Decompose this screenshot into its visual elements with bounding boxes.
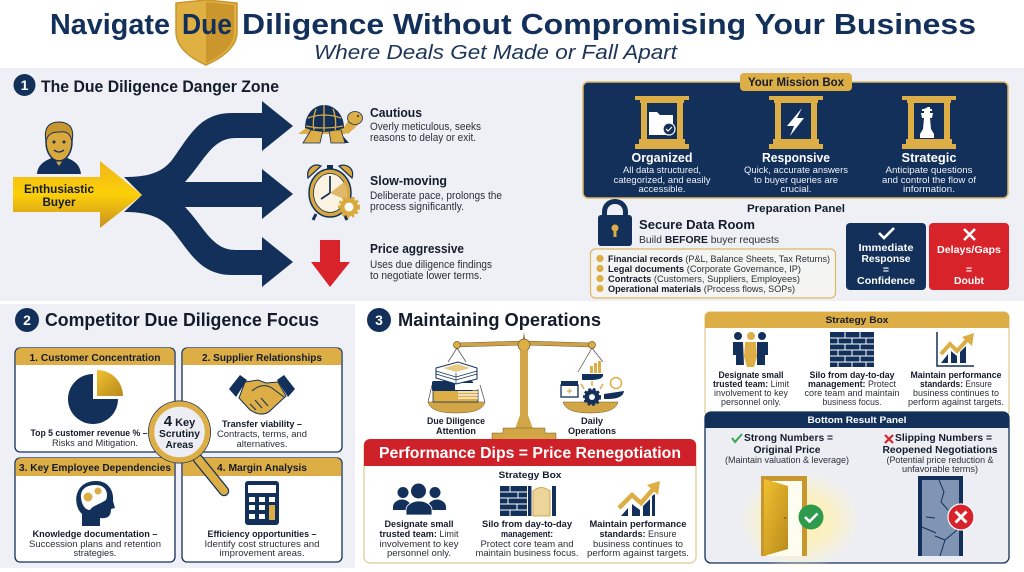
card: key employee dependencies	[15, 458, 175, 562]
strategy: silo: Protect core team and	[480, 539, 574, 549]
arrow: branching navy arrows	[124, 101, 293, 287]
strategy: performance: business continues to	[593, 539, 683, 549]
card: key employee dependencies: 3. Key Employee Dependencies	[19, 463, 171, 474]
card: margin analysis	[182, 458, 342, 562]
card: customer concentration	[15, 348, 175, 452]
panel: bottom result panel: Bottom Result Panel	[808, 415, 906, 426]
card: margin analysis: improvement areas.	[220, 548, 304, 558]
panel: delays and gaps	[929, 223, 1009, 290]
arrow: enthusiastic buyer gold arrow	[13, 161, 142, 228]
strategy: silo	[476, 519, 578, 558]
mission: organized	[614, 96, 711, 194]
icon: red down arrow	[311, 240, 350, 287]
mission: responsive: Quick, accurate answers	[744, 165, 848, 175]
title: Diligence Without Compromising Your Business	[242, 9, 976, 41]
mission box tab: Your Mission Box	[748, 77, 845, 89]
strategy: performance: Maintain performance	[590, 519, 686, 529]
card: supplier relationships: Transfer viability –	[222, 419, 302, 429]
text: performance: perform against targets.	[908, 397, 1004, 407]
mission: responsive: crucial.	[780, 184, 812, 194]
icon: cracked door	[918, 476, 974, 556]
icon: calculator	[245, 481, 279, 525]
panel: right strategy box	[705, 312, 1009, 417]
arrow: enthusiastic buyer gold arrow: Enthusiastic	[24, 182, 94, 196]
mission: strategic: and control the flow of	[882, 175, 976, 185]
label: due diligence attention: Attention	[436, 426, 476, 436]
icon: wall and door	[500, 486, 556, 516]
result: slipping numbers: Reopened Negotiations	[882, 444, 998, 456]
icon: document stack	[432, 362, 478, 402]
mission: strategic: information.	[903, 184, 955, 194]
card: margin analysis: Efficiency opportunities –	[208, 529, 316, 539]
result: strong numbers: Strong Numbers =	[744, 432, 833, 444]
panel: section 2 background	[0, 304, 355, 568]
mission: responsive: to buyer queries are	[754, 175, 838, 185]
text: slow-moving	[370, 174, 502, 213]
icon: head with gears	[76, 481, 115, 526]
strategy: performance: perform against targets.	[587, 548, 689, 558]
text: designate team: personnel only.	[721, 397, 781, 407]
text: silo: core team and maintain	[804, 388, 900, 398]
panel: right strategy box: Strategy Box	[826, 315, 889, 326]
result: slipping numbers	[882, 432, 998, 474]
text: price aggressive	[370, 242, 493, 282]
text: silo	[804, 370, 900, 407]
section 2 heading: 2	[23, 312, 31, 328]
panel: delays and gaps: =	[966, 264, 972, 276]
icon: enthusiastic buyer person	[37, 122, 81, 174]
result: slipping numbers: unfavorable terms)	[902, 464, 978, 474]
chart: pie	[68, 370, 123, 424]
arrow: enthusiastic buyer gold arrow: Buyer	[42, 195, 76, 209]
text: silo: Silo from day-to-day	[810, 370, 895, 380]
heading: preparation panel: Preparation Panel	[747, 203, 845, 215]
section 2 heading: Competitor Due Diligence Focus	[45, 310, 319, 330]
strategy: performance: standards: Ensure	[600, 529, 676, 539]
panel: immediate response: Immediate	[858, 242, 914, 254]
label: daily operations: Daily	[581, 416, 604, 426]
panel: data room checklist: Contracts (Customers, Suppliers, Employees)	[608, 274, 800, 284]
strategy: designate team: personnel only.	[387, 548, 451, 558]
panel: bottom result panel	[705, 412, 1009, 570]
panel: delays and gaps: Doubt	[954, 275, 984, 287]
text: slow-moving: Deliberate pace, prolongs the	[370, 190, 502, 202]
mission: organized: All data structured,	[623, 165, 701, 175]
text: designate team: involvement to key	[714, 388, 788, 398]
text: slow-moving: process significantly.	[370, 201, 464, 213]
icon: growth chart	[619, 481, 660, 516]
panel: data room checklist: Legal documents (Corporate Governance, IP)	[608, 264, 801, 274]
icon: daily operations cluster	[561, 361, 624, 404]
panel: immediate response: Response	[862, 253, 911, 265]
text: performance	[908, 370, 1004, 407]
result: slipping numbers: (Potential price reduction &	[886, 455, 994, 465]
strategy: performance	[587, 519, 689, 558]
card: supplier relationships: Contracts, terms, and	[217, 429, 307, 439]
icon: magnifier with 4 key scrutiny areas: Scrutiny	[159, 429, 200, 440]
text: secure data room: Secure Data Room	[639, 217, 755, 232]
panel: your mission box	[583, 73, 1008, 198]
label: due diligence attention	[427, 416, 485, 436]
strategy: designate team: involvement to key	[380, 539, 459, 549]
strategy: designate team: Designate small	[384, 519, 454, 529]
icon: axis growth chart	[937, 332, 974, 366]
icon: padlock	[598, 202, 632, 246]
card: key employee dependencies: Knowledge documentation –	[32, 529, 158, 539]
panel: data room checklist	[590, 249, 836, 298]
panel: delays and gaps: Delays/Gaps	[937, 244, 1001, 256]
card: supplier relationships: alternatives.	[236, 439, 288, 449]
section 3 heading: Maintaining Operations	[398, 310, 601, 330]
text: silo: business focus.	[822, 397, 882, 407]
icon: magnifier with 4 key scrutiny areas	[148, 400, 224, 491]
strategy: silo: Silo from day-to-day	[482, 519, 573, 529]
text: price aggressive: to negotiate lower terms.	[370, 270, 482, 282]
text: designate team: Designate small	[718, 370, 784, 380]
text: cautious: reasons to delay or exit.	[370, 132, 476, 144]
text: performance: business continues to	[913, 388, 999, 398]
mission: responsive: Responsive	[762, 150, 830, 165]
label: daily operations	[568, 416, 616, 436]
text: price aggressive: Price aggressive	[370, 242, 464, 256]
section 3 heading: 3	[375, 312, 383, 328]
text: performance: standards: Ensure	[920, 379, 992, 389]
strategy: designate team	[380, 519, 459, 558]
section 1 heading: 1	[21, 77, 29, 93]
result: slipping numbers: Slipping Numbers =	[895, 432, 992, 444]
icon: balance scale	[428, 332, 618, 440]
mission box tab	[740, 73, 852, 91]
card: key employee dependencies: strategies.	[74, 548, 116, 558]
card: customer concentration: Top 5 customer revenue % –	[30, 428, 148, 438]
icon: open door with glow	[738, 470, 862, 570]
icon: magnifier with 4 key scrutiny areas: 4 Key	[164, 413, 196, 430]
panel: performance dips: Strategy Box	[498, 470, 562, 481]
icon: handshake	[229, 375, 295, 414]
card: margin analysis: Identify cost structures and	[204, 539, 320, 549]
strategy: silo: management:	[501, 529, 553, 539]
panel: section 1 background	[0, 68, 1024, 301]
title: Due	[182, 9, 232, 41]
strategy: designate team: trusted team: Limit	[380, 529, 459, 539]
text: designate team	[713, 370, 789, 407]
text: silo: management: Protect	[808, 379, 896, 389]
panel: immediate response	[846, 223, 926, 290]
label: due diligence attention: Due Diligence	[427, 416, 485, 426]
panel: data room checklist: Operational materials (Process flows, SOPs)	[608, 284, 795, 294]
card: customer concentration: Risks and Mitigation.	[52, 438, 138, 448]
section 1 heading: The Due Diligence Danger Zone	[41, 77, 279, 96]
text: price aggressive: Uses due diligence findings	[370, 259, 493, 271]
icon: alarm clock with gear	[308, 165, 358, 220]
panel: data room checklist: Financial records (P&L, Balance Sheets, Tax Returns)	[608, 254, 830, 264]
text: cautious	[370, 106, 482, 144]
text: secure data room: Build BEFORE buyer requests	[639, 234, 779, 246]
text: slow-moving: Slow-moving	[370, 174, 447, 188]
card: margin analysis: 4. Margin Analysis	[217, 463, 307, 474]
panel: performance dips	[364, 439, 696, 563]
mission: organized: categorized, and easily	[614, 175, 711, 185]
mission: strategic	[882, 96, 976, 194]
panel: performance dips: Performance Dips = Price Renegotiation	[379, 445, 681, 462]
panel: immediate response: =	[883, 264, 889, 276]
result: strong numbers	[725, 432, 849, 465]
text: performance: Maintain performance	[910, 370, 1002, 380]
subtitle: Where Deals Get Made or Fall Apart	[314, 42, 679, 64]
strategy: silo: maintain business focus.	[476, 548, 578, 558]
label: daily operations: Operations	[568, 426, 616, 436]
mission: organized: accessible.	[638, 184, 686, 194]
icon: magnifier with 4 key scrutiny areas: Areas	[166, 440, 194, 451]
icon: turtle	[298, 105, 362, 143]
icon: brick wall	[830, 332, 874, 367]
card: supplier relationships: 2. Supplier Relationships	[202, 353, 322, 364]
mission: strategic: Anticipate questions	[886, 165, 973, 175]
panel: immediate response: Confidence	[857, 275, 915, 287]
text: secure data room	[639, 217, 779, 246]
mission: strategic: Strategic	[902, 150, 956, 165]
icon: three people	[733, 332, 768, 367]
icon: gold shield behind title	[176, 0, 237, 65]
card: key employee dependencies: Succession plans and retention	[29, 539, 161, 549]
text: cautious: Overly meticulous, seeks	[370, 121, 482, 133]
title: Navigate	[50, 9, 170, 41]
icon: team	[393, 484, 446, 515]
text: designate team: trusted team: Limit	[713, 379, 789, 389]
result: strong numbers: (Maintain valuation & leverage)	[725, 455, 849, 465]
card: supplier relationships	[182, 348, 342, 452]
text: cautious: Cautious	[370, 106, 422, 120]
result: strong numbers: Original Price	[754, 444, 821, 456]
mission: responsive	[744, 96, 848, 194]
mission: organized: Organized	[632, 150, 693, 165]
card: customer concentration: 1. Customer Concentration	[30, 353, 160, 364]
